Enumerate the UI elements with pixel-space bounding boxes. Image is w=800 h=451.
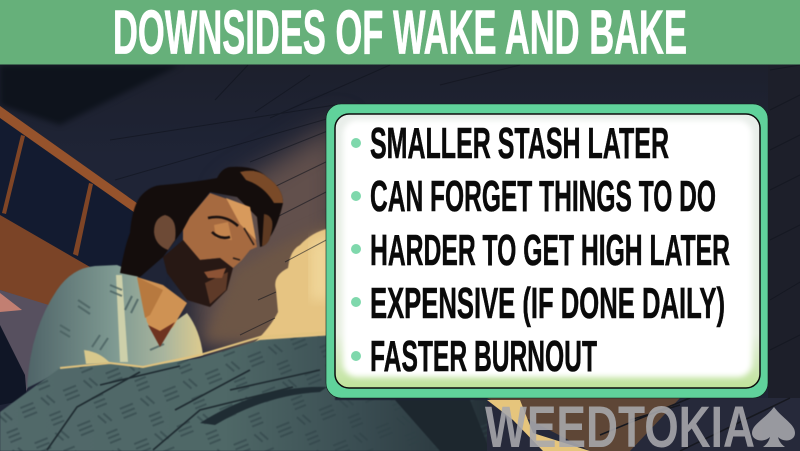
beard	[163, 240, 233, 307]
blanket	[0, 332, 500, 451]
header band	[0, 0, 800, 68]
neck	[137, 277, 187, 340]
eye and brow	[208, 217, 238, 238]
shirt	[27, 265, 203, 388]
wall planks	[110, 65, 800, 350]
wall glow	[195, 120, 340, 350]
pillow	[0, 290, 52, 392]
list item 5	[351, 332, 597, 381]
icon: spade	[752, 407, 795, 447]
bed headboard	[0, 106, 141, 307]
ear	[154, 215, 176, 250]
panel: downsides list	[326, 104, 768, 398]
list item 5: FASTER BURNOUT	[370, 332, 597, 381]
face	[183, 193, 257, 268]
list item 1	[351, 119, 669, 168]
lower right bed	[487, 398, 800, 451]
hair	[120, 167, 283, 277]
man	[27, 167, 283, 388]
